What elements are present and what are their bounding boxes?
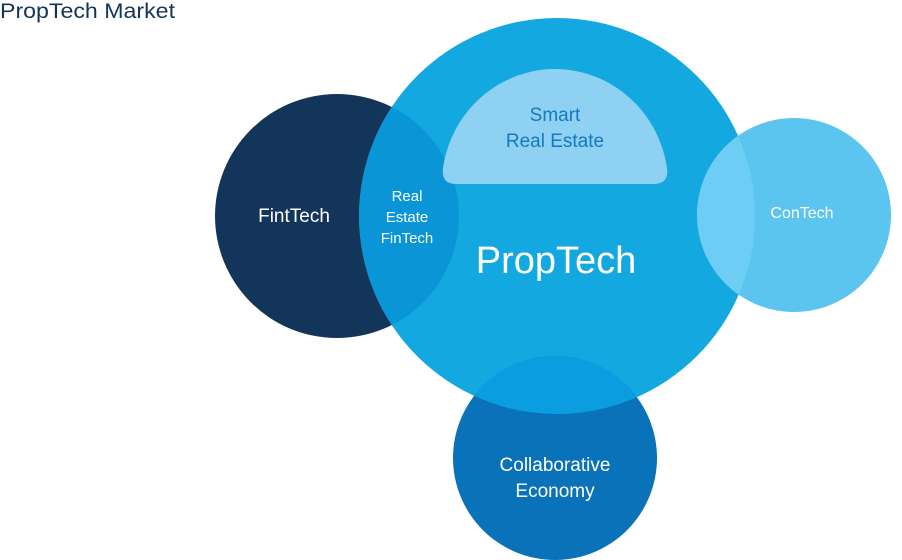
title: PropTech Market [0,0,175,23]
panel: Smart Real Estate: Smart [530,105,581,126]
circle: Collaborative Economy [453,356,657,560]
panel: Smart Real Estate: Real Estate [506,131,604,152]
circle: FinTech: FintTech [258,206,330,227]
overlap: Real Estate FinTech: FinTech [381,230,433,247]
circle: Collaborative Economy: Economy [515,481,595,502]
circle: PropTech: PropTech [476,240,636,282]
overlap: Real Estate FinTech: Estate [386,209,428,226]
overlap: Real Estate FinTech [359,107,459,325]
overlap: ConTech [697,136,755,294]
panel: Smart Real Estate [443,69,667,184]
circle: Collaborative Economy: Collaborative [500,455,610,476]
circle: ConTech: ConTech [770,205,834,222]
overlap: Real Estate FinTech: Real [392,188,422,205]
circle: ConTech [697,118,891,312]
overlap: Collaborative [474,356,637,414]
circle: FinTech [215,94,459,338]
